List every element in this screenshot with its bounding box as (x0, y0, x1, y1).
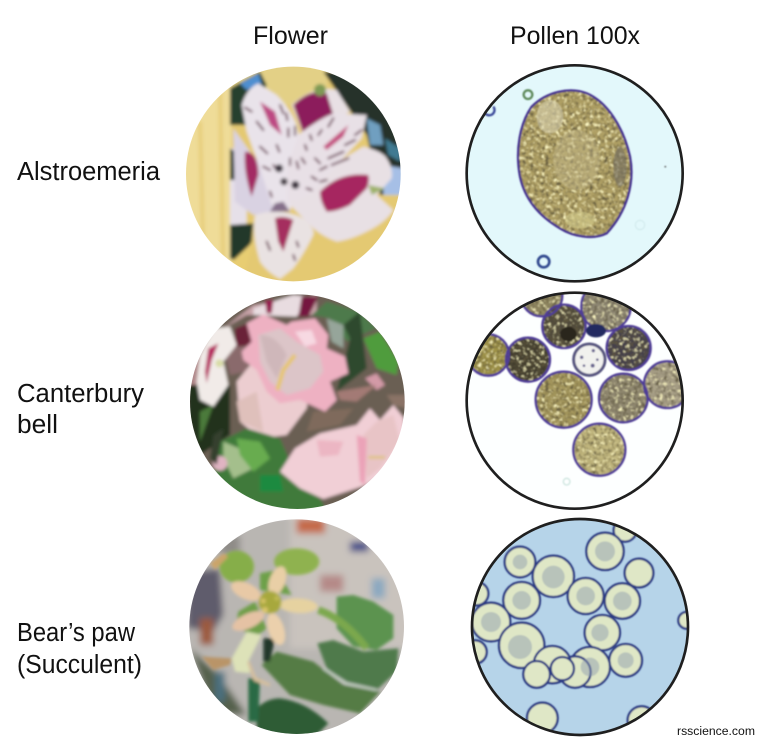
upper left petal (242, 83, 303, 212)
grain centres (481, 541, 634, 676)
lower flower (232, 632, 262, 673)
row label: Bear's paw (Succulent) (17, 619, 142, 679)
pollen grains (473, 294, 682, 476)
left petal (233, 128, 277, 215)
pale empty grain (574, 344, 605, 375)
second bell (280, 405, 404, 499)
leaves (337, 595, 393, 650)
greenery bottom (213, 428, 327, 512)
photo: Alstroemeria flower (186, 66, 401, 282)
pollen grain (518, 90, 631, 237)
right petal (290, 147, 393, 242)
heading: Flower: Flower (253, 22, 328, 50)
micrograph: Alstroemeria pollen (467, 65, 683, 281)
row label: Bear's paw (Succulent): (Succulent) (17, 651, 142, 679)
row label: Canterbury bell (17, 380, 144, 439)
pollen grains (473, 526, 687, 730)
bottom petal (254, 212, 314, 279)
upper right petal (287, 113, 367, 205)
row label: Bear's paw (Succulent): Bear’s paw (17, 619, 136, 647)
dark petal at top (292, 89, 350, 135)
photo: Bear's paw succulent flower (189, 519, 404, 734)
small debris rings (524, 90, 532, 99)
heading: Pollen 100x: Pollen 100x (510, 22, 640, 50)
micrograph: Canterbury bell pollen (467, 275, 691, 509)
main bell (237, 355, 310, 438)
pansy left (197, 327, 237, 407)
row label: Canterbury bell: Canterbury (17, 380, 144, 408)
row label: Alstroemeria: Alstroemeria (17, 158, 161, 186)
buds (219, 551, 254, 583)
speckles (245, 105, 362, 260)
flower petals (230, 578, 262, 603)
micrograph: Bear's paw pollen (463, 519, 695, 735)
photo: Canterbury bell flower (190, 294, 405, 509)
row label: Canterbury bell: bell (17, 411, 58, 439)
source credit: rsscience.com (677, 726, 755, 738)
blurred background (189, 519, 404, 734)
